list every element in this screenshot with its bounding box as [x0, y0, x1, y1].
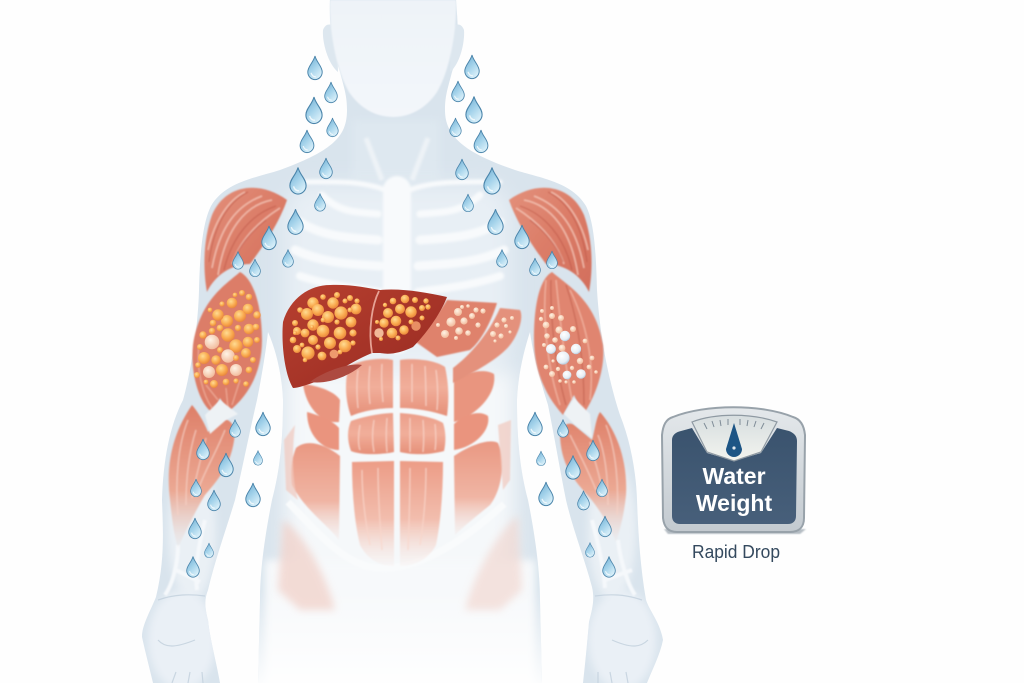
muscle: left deltoid — [204, 188, 287, 292]
scale frame — [662, 407, 805, 532]
water drops around neck and shoulders, left — [233, 56, 338, 277]
body inner shading — [148, 120, 656, 683]
muscle: right obliques — [454, 371, 511, 535]
fat cells in right biceps — [539, 306, 598, 384]
scale label: Weight — [696, 490, 772, 516]
face and jaw — [330, 0, 456, 117]
muscle: right deltoid — [509, 188, 592, 292]
muscle: right chest-side patch — [453, 308, 521, 383]
water drops around neck and shoulders, right — [450, 55, 557, 276]
scale label: Water — [702, 463, 766, 489]
muscle: left biceps — [192, 272, 262, 413]
needle pivot — [732, 446, 736, 450]
muscle: left forearm — [169, 405, 235, 548]
organ: liver — [282, 285, 447, 388]
scale display panel — [672, 428, 797, 524]
muscle: left chest-side patch — [413, 300, 497, 357]
liver underside lobe — [310, 364, 362, 383]
bathroom scale badge — [662, 407, 806, 562]
tendons at elbows — [205, 398, 592, 438]
water drops along right forearm — [528, 412, 615, 577]
scale shadow — [664, 529, 806, 534]
wrist tendons — [165, 520, 635, 595]
muscle: left obliques — [284, 384, 340, 540]
muscle: right biceps — [534, 272, 603, 415]
figure: translucent human body — [142, 0, 663, 683]
fat cells in left biceps — [194, 290, 261, 388]
muscle: right forearm — [560, 412, 626, 542]
scale dial — [692, 415, 777, 461]
dial ticks — [704, 419, 764, 429]
rib cage — [295, 182, 504, 340]
dial needle — [726, 423, 742, 457]
pelvic faint muscles and bands — [278, 502, 522, 610]
muscle: rectus abdominis — [346, 359, 448, 566]
body silhouette — [142, 0, 663, 683]
water drops along left forearm — [187, 412, 270, 577]
liver fissure — [370, 291, 379, 353]
hand details — [158, 595, 648, 683]
neck tendons — [366, 138, 428, 180]
caption: Rapid Drop — [692, 542, 780, 562]
ears — [323, 24, 464, 72]
fat cells in liver — [290, 292, 431, 362]
fat cells on chest-side patches — [436, 304, 514, 343]
